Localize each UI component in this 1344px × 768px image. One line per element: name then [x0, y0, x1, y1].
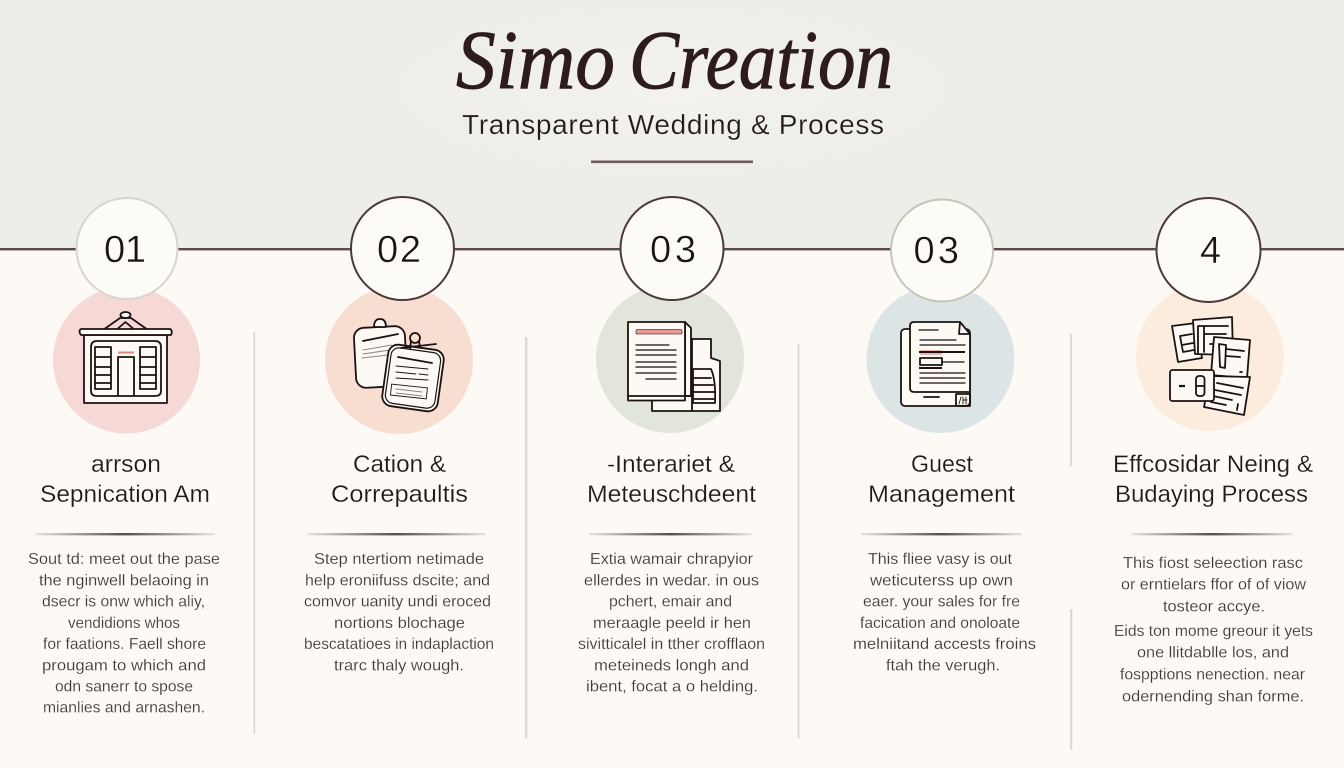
body text: help eroniifuss dscite; and — [305, 572, 490, 590]
heading rule — [307, 533, 486, 535]
body text: meteineds longh and — [594, 658, 749, 674]
heading — [587, 451, 756, 508]
heading rule — [1131, 533, 1293, 535]
body text: prougam to which and — [42, 658, 206, 674]
heading: Effcosidar Neing & — [1113, 451, 1313, 478]
body text: the nginwell belaoing in — [39, 572, 209, 590]
body text: one llitdablle los, and — [1137, 644, 1289, 662]
icon circle — [596, 285, 744, 433]
step number — [891, 200, 993, 302]
heading — [1113, 451, 1313, 508]
icon circle — [325, 286, 473, 434]
heading: Sepnication Am — [40, 481, 210, 508]
body text: pchert, emair and — [609, 594, 732, 610]
panel: step 5 — [1113, 198, 1313, 706]
body text: weticuterss up own — [869, 572, 1013, 590]
body text — [28, 551, 220, 716]
heading rule — [35, 533, 215, 535]
icon: budget papers — [1170, 317, 1250, 415]
body text: meraagle peeld ir hen — [593, 615, 751, 632]
title: Simo — [456, 14, 615, 107]
step number — [620, 197, 724, 300]
step number: 01 — [104, 229, 146, 271]
body text: eaer. your sales for fre — [863, 594, 1020, 610]
subtitle: Transparent Wedding & Process — [462, 109, 884, 140]
body text: facication and onoloate — [860, 615, 1020, 632]
panel: step 1 — [28, 198, 220, 716]
body text — [304, 551, 494, 674]
title — [456, 14, 893, 107]
heading — [868, 451, 1015, 508]
icon circle — [53, 286, 200, 434]
body text: mianlies and arnashen. — [43, 700, 205, 716]
panel: step 2 — [304, 197, 494, 674]
heading: Meteuschdeent — [587, 481, 756, 508]
step number: 4 — [1200, 230, 1221, 272]
body text: vendidions whos — [68, 615, 180, 632]
body text: Sout td: meet out the pase — [28, 551, 220, 568]
body text: odernending shan forme. — [1122, 688, 1304, 706]
heading: Guest — [911, 451, 973, 478]
heading — [331, 451, 468, 508]
body text: ftah the verugh. — [886, 658, 1000, 674]
body text: This fiost seleection rasc — [1123, 555, 1303, 572]
body text: odn sanerr to spose — [55, 678, 193, 696]
step number — [76, 198, 178, 299]
step number — [351, 197, 454, 300]
icon: venue building — [80, 312, 172, 403]
body text: trarc thaly wough. — [334, 658, 464, 674]
heading — [40, 451, 210, 508]
icon circle — [1136, 283, 1284, 431]
panel: step 4 — [853, 200, 1036, 674]
heading rule — [589, 533, 752, 535]
body text: ellerdes in wedar. in ous — [584, 572, 759, 590]
icon circle — [866, 285, 1014, 433]
step number: 03 — [914, 230, 959, 272]
heading rule — [861, 533, 1022, 535]
body text: dsecr is onw which aliy, — [42, 594, 205, 610]
heading: Cation & — [353, 451, 446, 478]
body text: for faations. Faell shore — [43, 636, 206, 653]
body text — [578, 551, 765, 696]
body text: fospptions nenection. near — [1120, 666, 1306, 684]
body text: melniitand accests froins — [853, 636, 1036, 653]
body text: Step ntertiom netimade — [314, 551, 484, 568]
heading: arrson — [91, 451, 161, 478]
body text: Extia wamair chrapyior — [590, 551, 754, 568]
title: Creation — [629, 14, 893, 107]
body text: This fliee vasy is out — [868, 551, 1013, 568]
body text: comvor uanity undi eroced — [304, 594, 491, 610]
heading: Budaying Process — [1115, 481, 1308, 508]
body text: or erntielars ffor of of viow — [1121, 576, 1306, 594]
body text: nortions blochage — [334, 615, 465, 632]
body text: bescatatioes in indaplaction — [304, 636, 494, 653]
step number: 02 — [377, 229, 421, 271]
step number: 03 — [650, 229, 696, 271]
title rule — [591, 160, 753, 163]
step number — [1156, 198, 1260, 302]
heading: Correpaultis — [331, 481, 468, 508]
panel: step 3 — [578, 197, 765, 696]
icon: guest list document — [901, 322, 970, 406]
body text — [1114, 555, 1313, 706]
icon: documents — [628, 322, 720, 411]
body text: Eids ton mome greour it yets — [1114, 623, 1313, 640]
body text: sivitticalel in tther crofflaon — [578, 636, 765, 653]
heading: Management — [868, 481, 1015, 508]
heading: -Interariet & — [607, 451, 735, 478]
body text: tosteor accye. — [1163, 598, 1265, 616]
body text — [853, 551, 1036, 674]
icon: clipboards — [353, 319, 445, 413]
body text: ibent, focat a o helding. — [586, 678, 758, 696]
